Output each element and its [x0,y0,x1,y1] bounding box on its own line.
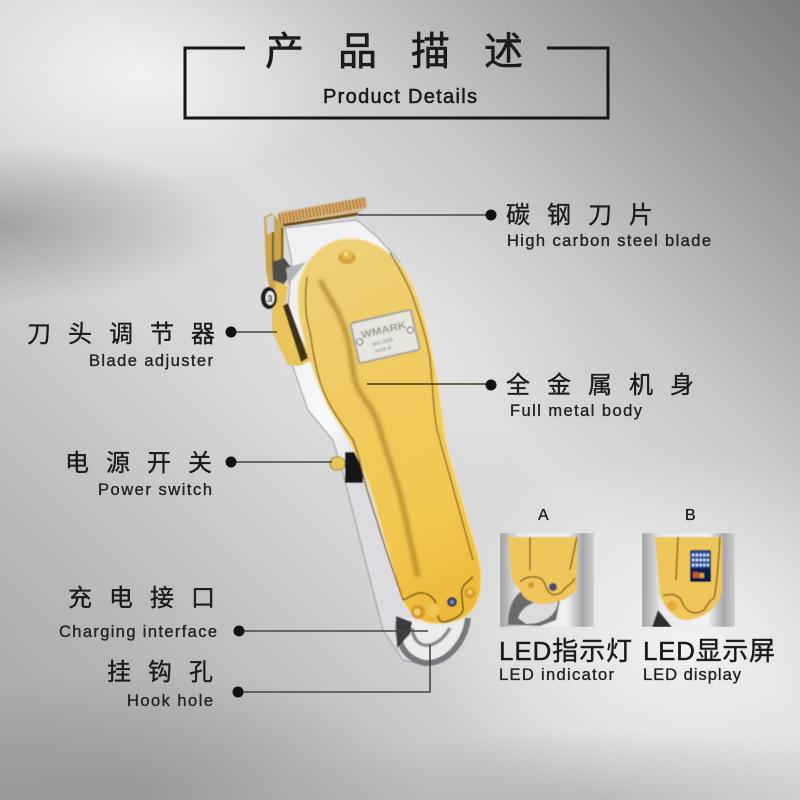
body nameplate [350,310,420,363]
LED screen [690,550,711,582]
blade adjuster dial [261,287,277,309]
body nameplate: MADE IN [375,345,392,354]
callout: blade adjuster: Blade adjuster [89,352,214,370]
panel B caption: LED显示屏 [643,636,775,666]
callout: charging interface: Charging interface [59,623,217,641]
callout: charging interface: 充电接口 [68,585,232,612]
callout: blade [358,202,711,250]
callout: hook hole: Hook hole [127,692,213,710]
gold metal body [298,239,481,624]
callout: blade adjuster: 刀头调节器 [27,321,232,348]
hook hole loop [396,616,468,663]
bottom rim contour [403,577,473,622]
callout: hook hole: 挂钩孔 [107,659,230,686]
callout: power switch: 电源开关 [65,450,229,477]
callout: metal body: 全金属机身 [506,372,711,399]
callout: blade: 碳钢刀片 [506,202,670,229]
subtitle: Product Details: Product Details [323,86,477,108]
body central shadow [320,280,418,577]
callout: blade: High carbon steel blade [507,232,711,250]
blade adjuster dial: 3 [267,294,273,305]
blade adjuster lever [272,282,312,366]
blade arm [264,213,306,290]
title frame [185,48,608,118]
panel A letter: A [538,507,549,524]
panel B letter: B [685,507,696,524]
panel A: LED indicator: LED indicator [499,666,614,684]
panel B photo [642,533,735,627]
title: 产品描述: 产品描述 [265,31,557,74]
panel A caption: LED指示灯 [499,636,632,666]
clipper product illustration [261,197,481,665]
panel A photo [500,533,594,627]
panel A: LED indicator [499,507,632,684]
panel B: LED display: LED display [643,666,742,684]
bottom screws and led [411,588,476,619]
body nameplate: MG-7026 [372,337,394,348]
panel B: LED display [642,507,775,684]
body top screw [338,250,356,264]
callout: blade adjuster [27,321,277,370]
steel blade teeth [278,197,367,226]
silver rear housing [285,220,440,665]
callout: hook hole [107,645,430,710]
body inner contour lines [306,277,403,600]
power switch [330,452,363,483]
callout: metal body: Full metal body [510,402,643,420]
body nameplate: WMARK [360,320,408,341]
callout: charging interface [59,585,428,641]
callout: power switch [65,450,332,499]
callout: metal body [367,372,711,420]
callout: power switch: Power switch [98,481,212,499]
title block [185,31,608,118]
